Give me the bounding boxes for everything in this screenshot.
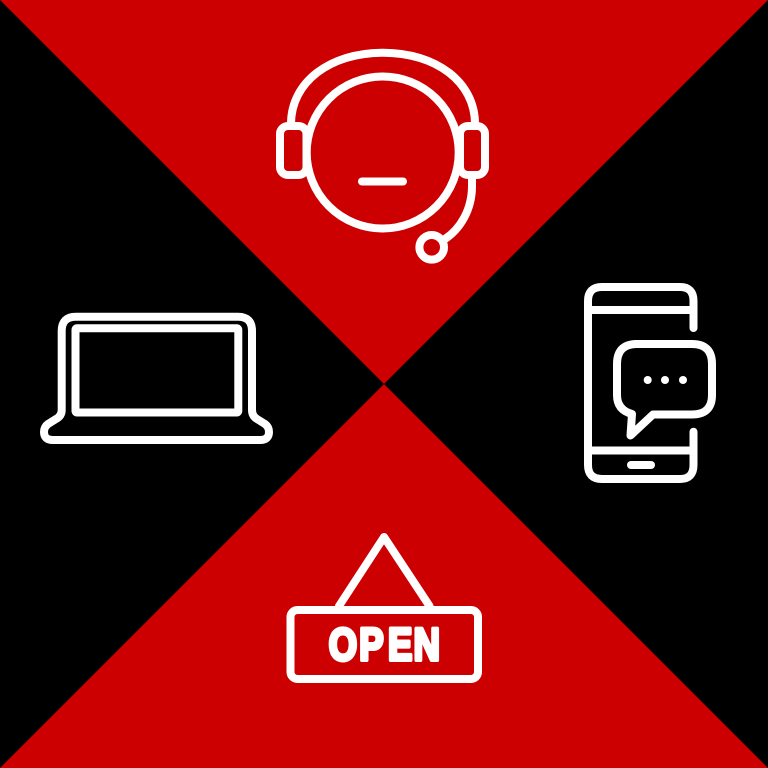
chat bubble [617,344,712,436]
sign hanger [339,537,430,606]
mouth [362,178,403,186]
head circle [307,76,459,228]
chat dots [644,376,687,384]
phone body [588,287,694,479]
phone bottom divider [588,446,694,454]
sign text: OPEN [329,619,440,670]
microphone wire [445,178,472,239]
icon: laptop [44,317,269,440]
laptop screen [76,328,238,412]
icon: hanging open sign [290,537,478,679]
microphone [419,235,444,260]
left ear cup [280,126,306,175]
headband [291,53,475,124]
laptop body [44,317,269,440]
sign board [290,610,478,679]
icon: customer support headset [280,53,485,260]
panel: bottom red triangle [0,384,768,768]
phone home button [631,461,651,469]
right ear cup [460,126,485,175]
panel: top red triangle [0,0,768,384]
phone top divider [588,306,694,314]
icon: smartphone with chat bubble [588,287,712,479]
